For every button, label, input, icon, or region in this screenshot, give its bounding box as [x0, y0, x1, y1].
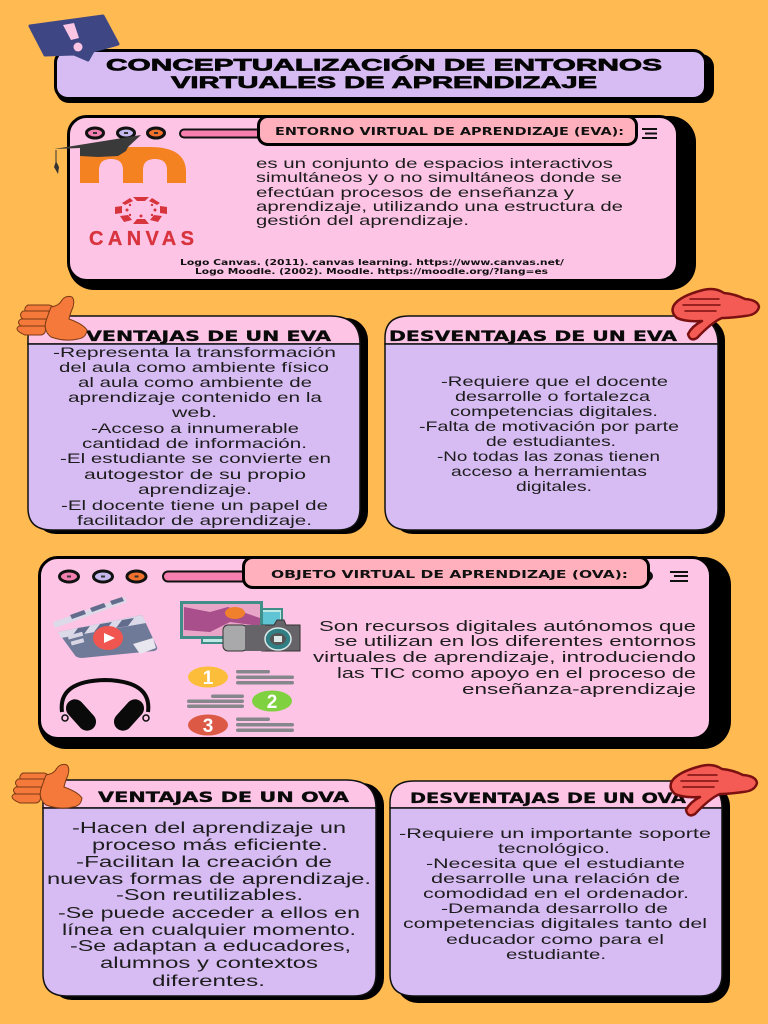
text: advantages list: web. — [170, 404, 217, 420]
panel: title — [56, 50, 714, 103]
logo: Moodle — [54, 135, 186, 183]
text: advantages list: -Hacen del aprendizaje un — [72, 820, 346, 837]
text: OVA definition — [313, 619, 696, 698]
text: advantages list: autogestor de su propio — [84, 466, 306, 482]
window button — [643, 571, 653, 581]
label: EVA heading — [258, 116, 636, 144]
panel: EVA advantages — [28, 316, 368, 534]
heading: DESVENTAJAS DE UN OVA — [410, 791, 686, 807]
icon: clapperboard — [53, 597, 157, 658]
text: disadvantages list: -Requiere un importante soporte — [399, 825, 711, 841]
text: logo references — [180, 258, 564, 276]
panel: EVA definition — [54, 116, 696, 290]
text: OVA definition: las TIC como apoyo en el proceso de — [337, 666, 696, 682]
text: disadvantages list: tecnológico. — [498, 840, 610, 856]
logo: Canvas — [89, 197, 194, 250]
text: advantages list: -El estudiante se convierte en — [60, 450, 331, 466]
text: disadvantages list: -Demanda desarrollo de — [441, 900, 668, 916]
text: disadvantages list: -Requiere que el docente — [441, 373, 668, 389]
text: advantages list: diferentes. — [152, 973, 265, 990]
text: disadvantages list: desarrolle o fortalezca — [455, 388, 650, 404]
text: EVA definition — [256, 155, 623, 228]
icon: thumb up OVA — [12, 764, 82, 808]
text: logo references: Logo Canvas. (2011). canvas learning. https://www.canvas.net/ — [180, 258, 564, 267]
text: OVA definition: enseñanza-aprendizaje — [462, 682, 696, 698]
text: EVA definition: efectúan procesos de enseñanza y — [256, 184, 574, 200]
text: disadvantages list: desarrolle una relación de — [431, 870, 680, 886]
panel: OVA advantages — [43, 780, 384, 1000]
icon: menu — [642, 129, 657, 138]
icon: headphones — [62, 680, 149, 734]
text: disadvantages list: de estudiantes. — [486, 433, 616, 449]
text: disadvantages list: acceso a herramientas — [451, 463, 647, 479]
text: advantages list: -Se adaptan a educadores, — [70, 938, 351, 955]
panel: EVA disadvantages — [385, 316, 725, 534]
text: advantages list — [53, 344, 336, 528]
text: disadvantages list: -No todas las zonas tienen — [437, 448, 660, 464]
icon: numbered list — [187, 666, 294, 737]
icon: thumb down EVA — [673, 289, 759, 339]
text: advantages list: línea en cualquier momento. — [62, 922, 356, 939]
text: disadvantages list — [419, 373, 679, 494]
text: advantages list — [47, 820, 371, 990]
panel: OVA disadvantages — [390, 781, 730, 1003]
label: EVA heading: ENTORNO VIRTUAL DE APRENDIZAJE (EVA): — [275, 126, 624, 138]
text: advantages list: nuevas formas de aprendizaje. — [47, 871, 371, 888]
text: advantages list: -El docente tiene un papel de — [61, 497, 328, 513]
icon: thumb down OVA — [671, 765, 757, 815]
window address bar — [180, 130, 265, 138]
text: disadvantages list: estudiante. — [506, 946, 606, 962]
text: OVA definition: se utilizan en los diferentes entornos — [334, 634, 696, 650]
text: advantages list: -Facilitan la creación de — [76, 854, 332, 871]
heading: DESVENTAJAS DE UN EVA — [389, 329, 677, 345]
text: advantages list: -Son reutilizables. — [116, 887, 303, 904]
text: disadvantages list — [399, 825, 711, 962]
text: EVA definition: gestión del aprendizaje. — [256, 212, 469, 228]
icon: numbered list: 1 — [203, 668, 214, 689]
label: OVA heading — [244, 558, 648, 588]
text: logo references: Logo Moodle. (2002). Moodle. https://moodle.org/?lang=es — [195, 267, 548, 276]
text: disadvantages list: -Falta de motivación por parte — [419, 418, 679, 434]
text: disadvantages list: -Necesita que el estudiante — [426, 855, 685, 871]
text: advantages list: -Representa la transformación — [53, 344, 336, 360]
text: OVA definition: Son recursos digitales autónomos que — [319, 619, 696, 635]
icon: menu — [670, 572, 688, 581]
icon: numbered list: 2 — [267, 692, 277, 713]
text: EVA definition: es un conjunto de espacios interactivos — [256, 155, 613, 171]
text: advantages list: aprendizaje. — [138, 481, 252, 497]
window address bar — [163, 572, 248, 582]
text: advantages list: proceso más eficiente. — [92, 837, 328, 854]
window dots — [60, 571, 146, 582]
text: advantages list: alumnos y contextos — [100, 955, 318, 972]
icon: thumb up EVA — [17, 296, 87, 340]
label: OVA heading: OBJETO VIRTUAL DE APRENDIZAJE (OVA): — [271, 569, 628, 581]
text: advantages list: del aula como ambiente físico — [59, 359, 329, 375]
logo: Canvas: CANVAS — [89, 228, 194, 250]
icon: numbered list: 3 — [203, 716, 213, 737]
icon: photos and camera — [182, 602, 300, 651]
text: disadvantages list: educador como para el — [446, 931, 664, 947]
heading: VENTAJAS DE UN OVA — [98, 790, 349, 806]
text: OVA definition: virtuales de aprendizaje, introduciendo — [313, 650, 696, 666]
text: advantages list: -Se puede acceder a ellos en — [58, 905, 360, 922]
heading: title text: CONCEPTUALIZACIÓN DE ENTORNOS — [106, 56, 662, 74]
window dots — [86, 128, 164, 138]
heading: title text — [106, 56, 662, 92]
text: disadvantages list: comodidad en el ordenador. — [423, 885, 689, 901]
text: EVA definition: aprendizaje, utilizando una estructura de — [256, 198, 623, 214]
heading: title text: VIRTUALES DE APRENDIZAJE — [171, 73, 597, 92]
heading: VENTAJAS DE UN EVA — [86, 329, 331, 345]
text: disadvantages list: competencias digitales. — [450, 403, 658, 419]
text: advantages list: aprendizaje contenido en la — [68, 389, 322, 405]
panel: OVA definition — [38, 557, 731, 749]
icon: alert speech bubble — [30, 16, 118, 60]
text: advantages list: -Acceso a innumerable — [91, 420, 299, 436]
text: disadvantages list: competencias digitales tanto del — [403, 915, 707, 931]
text: advantages list: facilitador de aprendizaje. — [77, 512, 312, 528]
text: advantages list: al aula como ambiente de — [78, 374, 312, 390]
text: disadvantages list: digitales. — [516, 478, 592, 494]
text: EVA definition: simultáneos y o no simultáneos donde se — [256, 169, 622, 185]
text: advantages list: cantidad de información. — [82, 435, 307, 451]
